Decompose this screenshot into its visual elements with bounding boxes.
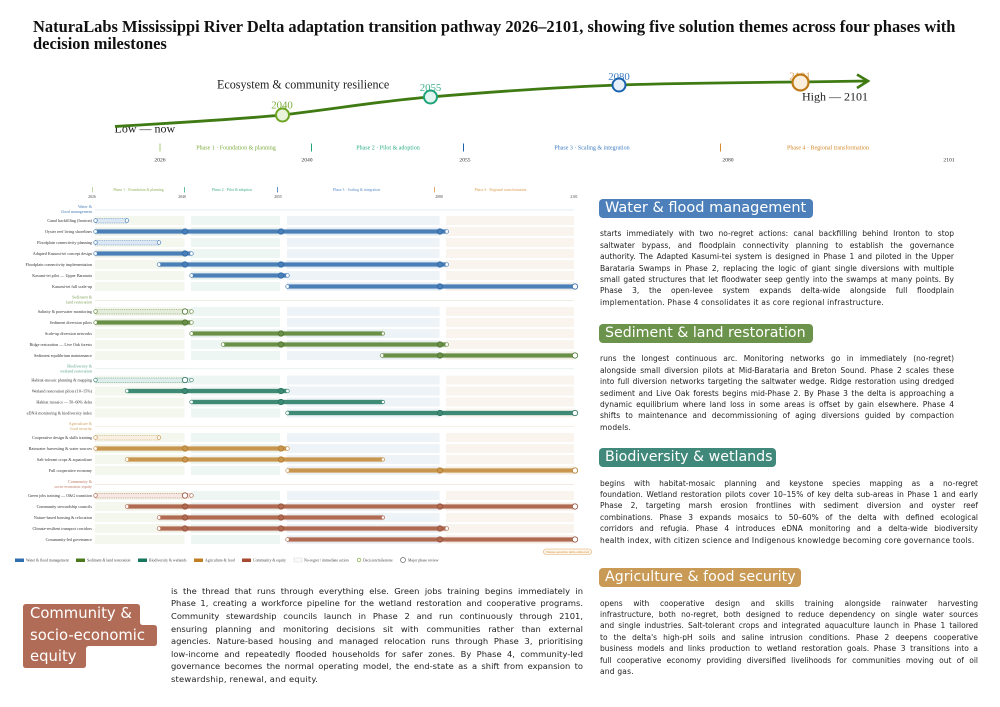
text: community xyxy=(171,586,583,684)
row: nature-based housing: Nature-based housing & relocation xyxy=(34,515,92,520)
text: water: Phase 3, the open-levee system expands delta-wide alongside full floodplain xyxy=(600,286,954,295)
row: kasumi-tei full scale-up xyxy=(52,282,578,291)
row: scale-up diversion networks: Scale-up diversion networks xyxy=(45,331,92,336)
row: floodplain implementation xyxy=(26,260,574,269)
row: full cooperative economy: Full cooperative economy xyxy=(49,468,93,473)
section label: agriculture: food security xyxy=(70,426,93,431)
text: water: saltwater bypass, and floodplain connectivity planning to establish the governance xyxy=(600,241,954,250)
gantt phase header: Phase 3 · Scaling & integration xyxy=(333,188,380,192)
phase strip: 2080 xyxy=(722,158,734,164)
text: sediment: alongside small diversion pilots at Mid-Barataria and Breton Sound. Phase 2 scales these xyxy=(600,366,954,375)
community and equity section xyxy=(28,479,578,544)
resilience trajectory and phase strip xyxy=(114,70,955,164)
gantt phase header: Phase 2 · Pilot & adoption xyxy=(212,188,252,192)
phase strip: Phase 4 · Regional transformation xyxy=(787,144,869,152)
phase strip: 2040 xyxy=(301,158,313,164)
row: floodplain implementation: Floodplain connectivity implementation xyxy=(26,262,92,267)
text: agriculture: opens with cooperative design and skills training alongside rainwater harvesting xyxy=(600,599,978,608)
row: full cooperative economy xyxy=(49,466,578,475)
heading: community: socio-economic xyxy=(30,627,145,644)
gantt phase header: 2101 xyxy=(570,195,578,199)
section label: agriculture xyxy=(69,421,574,431)
row: sediment equilibrium: Sediment equilibrium maintenance xyxy=(34,353,92,358)
text: water: small gated structures that let floodwater seep gently into the swamps at many points. By xyxy=(600,275,954,284)
row: habitat mosaics: Habitat mosaics — 50–60% delta xyxy=(36,400,92,404)
text: agriculture xyxy=(600,599,978,676)
text: water xyxy=(600,229,954,307)
section label: water xyxy=(61,204,574,214)
rising arrow xyxy=(115,74,868,126)
text: community: low-income and repeatedly flooded households for safer zones. By Phase 4, community-led xyxy=(171,649,583,659)
row: green jobs training xyxy=(28,491,574,500)
milestone 2055: 2055 xyxy=(420,82,441,94)
text: water: Barataria Swamps in Phase 2, replacing the logic of giant single diversions with multiple xyxy=(600,264,954,273)
row: salinity monitoring: Salinity & porewater monitoring xyxy=(38,309,92,314)
row: oyster reef: Oyster reef living shorelines xyxy=(45,229,92,234)
agriculture and food section xyxy=(29,421,578,475)
row: oyster reef xyxy=(45,227,574,236)
row: wetland restoration pilots: Wetland restoration pilots (10–15%) xyxy=(32,388,93,394)
row: nature-based housing xyxy=(34,513,574,522)
biodiversity and wetlands section xyxy=(27,364,578,418)
text: biodiversity: combinations. Phase 3 expands mosaics to 50–60% of the delta with defined ecological xyxy=(600,513,978,522)
row: transport corridors xyxy=(32,524,574,533)
text: water: starts immediately with two no-regret actions: canal backfilling behind Ironton to stop xyxy=(600,229,954,238)
legend: Agriculture & food xyxy=(205,558,235,562)
phase strip: Phase 2 · Pilot & adoption xyxy=(356,146,420,152)
row: adapted kasumi-tei: Adapted Kasumi-tei concept design xyxy=(33,251,92,256)
text: sediment: sediment and Live Oak forests begins mid-Phase 2. By Phase 3 the delta is approaching a xyxy=(600,389,954,398)
row: cooperative design: Cooperative design & skills training xyxy=(32,435,92,440)
row: kasumi-tei full scale-up: Kasumi-tei full scale-up xyxy=(52,284,92,289)
row: wetland restoration pilots xyxy=(32,386,574,396)
gantt phase header: 2040 xyxy=(178,195,186,199)
row: sediment equilibrium xyxy=(34,351,578,360)
milestone label 2101: 2101 xyxy=(789,70,811,82)
legend: Biodiversity & wetlands xyxy=(149,558,187,562)
row: canal backfilling: Canal backfilling (Ironton) xyxy=(47,218,93,223)
milestone 2101 marker xyxy=(792,74,808,90)
title: NaturaLabs Mississippi River Delta adaptation transition pathway 2026–2101, showing five solution themes across four phases with xyxy=(33,17,955,36)
text: biodiversity: corridors and refugia. Phase 4 introduces eDNA monitoring and a delta-wide biodiversity xyxy=(600,524,978,533)
text: community: agencies. Nature-based housing and managed relocation runs through Phase 3, prioritising xyxy=(171,636,583,646)
section label: sediment: land restoration xyxy=(66,300,92,304)
heading: community: Community & xyxy=(30,605,132,622)
row: ridge restoration: Ridge restoration — Live Oak forests xyxy=(30,342,92,347)
phase strip: Phase 3 · Scaling & integration xyxy=(554,146,630,152)
row: habitat mosaic planning xyxy=(31,376,574,384)
heading: agriculture: Agriculture & food security xyxy=(605,569,796,585)
legend: Water & flood management xyxy=(26,558,70,562)
section label: agriculture: Agriculture & xyxy=(69,421,93,426)
row: kasumi-tei pilot: Kasumi-tei pilot — Upper Barataria xyxy=(32,273,92,278)
text: water: authority. The Adapted Kasumi-tei system is designed in Phase 1 and piloted in the Upper xyxy=(600,252,954,261)
text: sediment: runs the longest continuous arc. Monitoring networks go in immediately (no-regret) xyxy=(600,354,954,363)
section label: biodiversity xyxy=(60,364,574,374)
row: sediment diversion pilots xyxy=(50,318,574,327)
row: rainwater harvesting xyxy=(29,444,574,453)
phase strip: 2101 xyxy=(943,158,955,164)
text: agriculture: to the delta's high-pH soils and saline intrusion conditions. Phase 2 deepens cooperative xyxy=(600,633,978,642)
heading: biodiversity: Biodiversity & wetlands xyxy=(605,449,773,465)
section label: community: Community & xyxy=(68,479,93,484)
row: stewardship councils: Community stewardship councils xyxy=(37,504,92,509)
heading: community: equity xyxy=(30,648,77,665)
title: decision milestones xyxy=(33,34,167,53)
gantt phase header: Phase 4 · Regional transformation xyxy=(475,188,527,192)
text: sediment: into full diversion networks targeting the saltwater wedge. Ridge restoration using dredged xyxy=(600,377,954,386)
text: sediment: shifts to maintenance and decommissioning of aging diversions guided by compaction xyxy=(600,411,954,420)
section label: sediment: Sediment & xyxy=(72,294,93,300)
row: stewardship councils xyxy=(37,502,578,511)
text: agriculture: business models and links production to wetland restoration goals. Phase 3 transitions into a xyxy=(600,644,978,653)
phase strip: 2026 xyxy=(154,158,166,164)
low end label: Low — now xyxy=(114,122,175,136)
row: kasumi-tei pilot xyxy=(32,271,574,280)
legend: Community & equity xyxy=(253,558,286,562)
text: biodiversity: Phase 2, targeting marsh erosion frontlines with sediment diversion and oyster reef xyxy=(600,501,978,510)
gantt phase header: 2026 xyxy=(88,195,96,199)
section label: community: socio-economic equity xyxy=(54,484,93,489)
heading: community xyxy=(23,604,157,668)
text: sediment xyxy=(600,354,954,432)
text: agriculture: and gas. xyxy=(600,667,634,676)
gantt phase header xyxy=(88,187,578,199)
high end label: High — 2101 xyxy=(802,90,868,104)
text: community: stewardship, renewal, and equity. xyxy=(171,674,318,684)
row: green jobs training: Green jobs training — O&G transition xyxy=(28,493,92,498)
sediment and land restoration section xyxy=(30,294,578,360)
text: community: governance becomes the normal operating model, the end-state as a shift from expansion to xyxy=(171,661,583,671)
phase strip: Phase 1 · Foundation & planning xyxy=(196,146,276,152)
gantt phase header: Phase 1 · Foundation & planning xyxy=(113,188,164,192)
legend: Major phase review xyxy=(408,558,439,562)
row: scale-up diversion networks xyxy=(45,329,574,338)
row: eDNA monitoring xyxy=(27,408,578,418)
text: sediment: dynamic equilibrium where land loss in some areas is offset by gain elsewhere. Phase 4 xyxy=(600,400,954,409)
legend: Decision/milestone xyxy=(363,558,393,562)
trajectory axis label: Ecosystem & community resilience xyxy=(217,78,389,92)
text: water: implementation. Phase 4 consolidates it as core regional infrastructure. xyxy=(600,298,884,307)
row: transport corridors: Climate-resilient transport corridors xyxy=(32,526,92,531)
row: community-led governance xyxy=(46,535,578,544)
milestone 2040 xyxy=(271,100,293,122)
section label: sediment xyxy=(66,294,574,304)
callout: nature-positive delta achieved: Nature-positive delta achieved xyxy=(546,550,589,554)
callout: nature-positive delta achieved xyxy=(544,549,592,554)
phase strip: 2055 xyxy=(459,158,471,164)
legend: Sediment & land restoration xyxy=(87,558,131,562)
water and flood management section xyxy=(26,204,578,291)
gantt phase header: 2080 xyxy=(435,195,443,199)
title xyxy=(33,17,956,53)
row: salinity monitoring xyxy=(38,307,574,316)
section label: biodiversity: Biodiversity & xyxy=(67,364,93,368)
row: adapted kasumi-tei xyxy=(33,249,574,258)
row: floodplain planning: Floodplain connectivity planning xyxy=(37,240,92,245)
row: habitat mosaics xyxy=(36,398,574,406)
row: habitat mosaic planning: Habitat-mosaic planning & mapping xyxy=(31,378,92,382)
row: salt-tolerant crops xyxy=(37,455,574,464)
text: sediment: models. xyxy=(600,423,631,432)
row: canal backfilling xyxy=(47,216,574,225)
row: floodplain planning xyxy=(37,238,574,247)
row: salt-tolerant crops: Salt-tolerant crops & aquaculture xyxy=(37,457,92,462)
section label: water: flood management xyxy=(61,209,93,214)
heading: sediment: Sediment & land restoration xyxy=(605,325,806,341)
text: agriculture: infrastructure, both no-regret, both designed to reduce dependency on single water sources xyxy=(600,610,978,619)
section label: community xyxy=(54,479,574,489)
row: cooperative design xyxy=(32,433,574,442)
row: rainwater harvesting: Rainwater harvesting & water sources xyxy=(29,446,92,451)
milestone 2080: 2080 xyxy=(608,71,630,83)
heading: water: Water & flood management xyxy=(605,200,806,216)
row: eDNA monitoring: eDNA monitoring & biodiversity index xyxy=(27,410,93,416)
phase strip xyxy=(154,144,955,164)
text: biodiversity: foundation. Wetland restoration pilots cover 10–15% of key delta sub-areas in Phase 1 and early xyxy=(600,490,978,499)
milestone 2055 xyxy=(420,82,441,104)
legend: No-regret / immediate action xyxy=(304,558,349,562)
section label: biodiversity: wetland restoration xyxy=(60,368,92,374)
text: community: Phase 1, creating a workforce pipeline for the wetland restoration and cooperative programs. xyxy=(171,598,583,608)
text: biodiversity: health index, with citizen science and Indigenous knowledge becoming core governance tools. xyxy=(600,536,975,545)
text: community: Community stewardship councils launch in Phase 2 and run continuously through 2101, xyxy=(171,611,583,621)
milestone 2080 xyxy=(608,71,630,92)
text: community: ensuring planning and monitoring decisions sit with communities rather than external xyxy=(171,624,583,634)
text: agriculture: and single industries. Salt-tolerant crops and integrated aquaculture launch in Phase 1 tailored xyxy=(600,621,978,630)
gantt phase header: 2055 xyxy=(274,195,282,199)
milestone 2040: 2040 xyxy=(271,100,293,112)
row: sediment diversion pilots: Sediment diversion pilots xyxy=(50,320,92,325)
text: biodiversity xyxy=(600,479,978,545)
text: community: is the thread that runs through everything else. Green jobs training begins immediately in xyxy=(171,586,583,596)
section label: water: Water & xyxy=(78,204,93,209)
row: community-led governance: Community-led governance xyxy=(46,537,92,542)
text: agriculture: full cooperative economy providing diversified livelihoods for communities moving out of oil xyxy=(600,656,978,665)
text: biodiversity: begins with habitat-mosaic planning and keystone species mapping as a no-regret xyxy=(600,479,978,488)
row: ridge restoration xyxy=(30,340,574,349)
legend xyxy=(15,558,439,562)
